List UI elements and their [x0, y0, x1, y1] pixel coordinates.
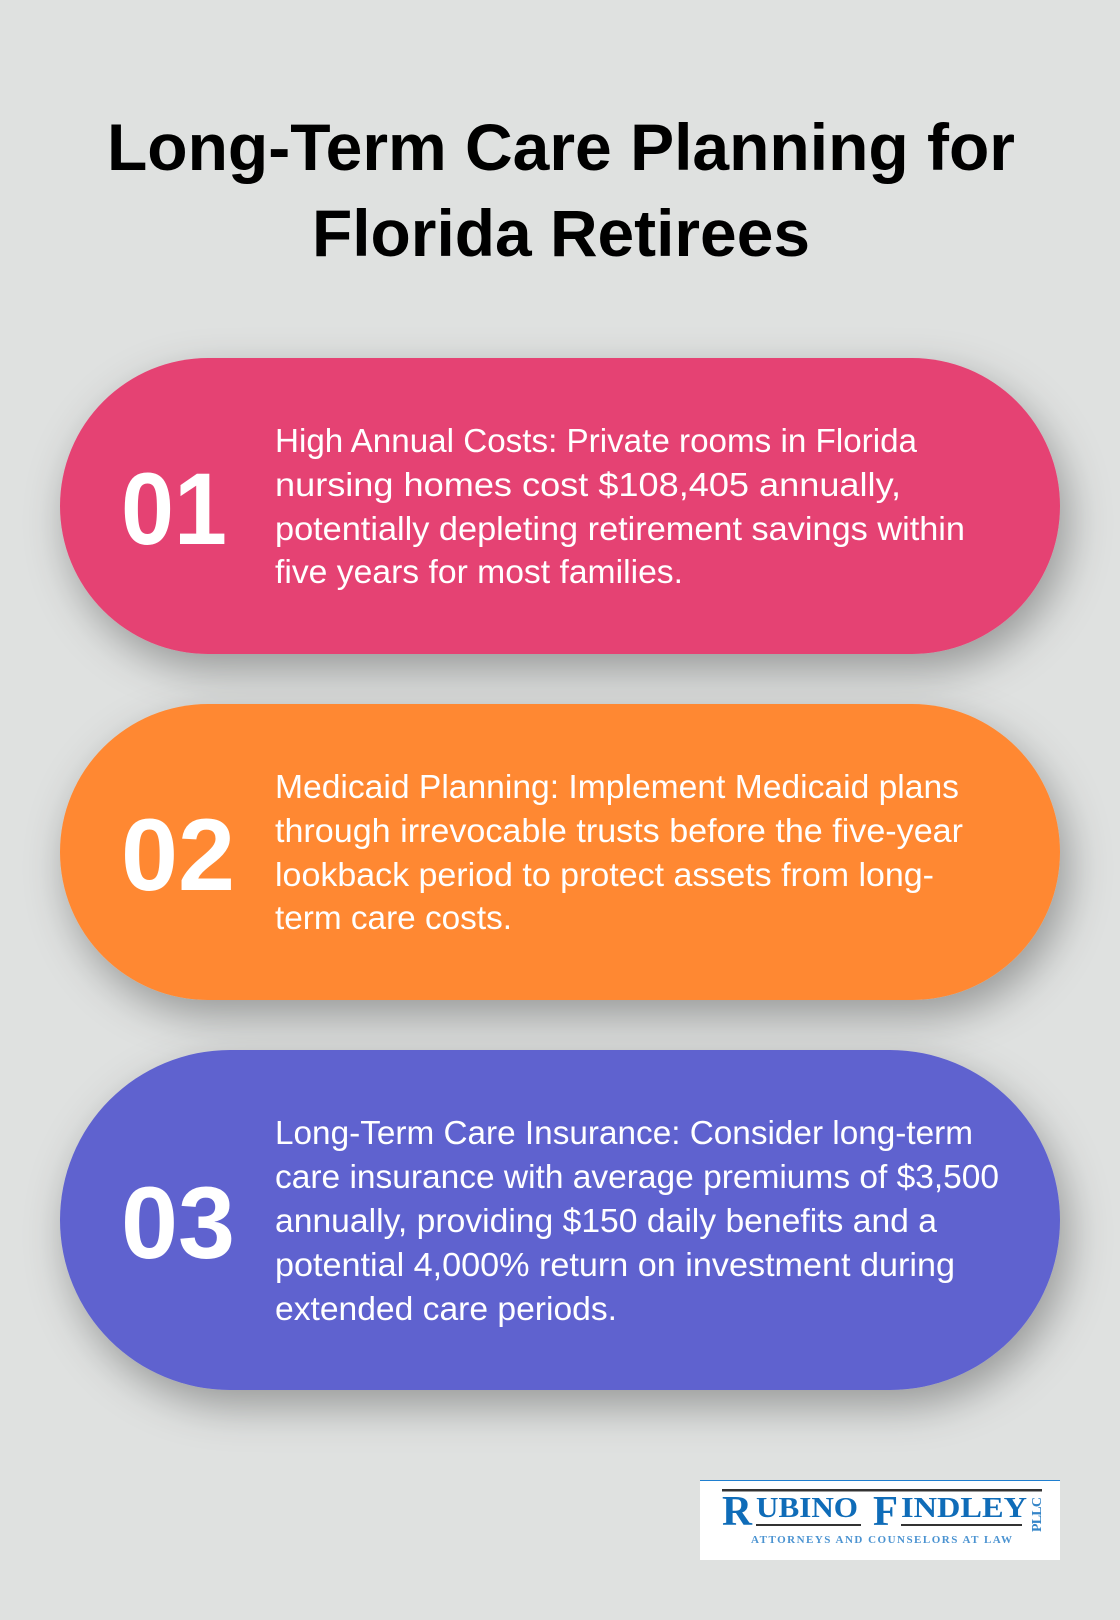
- text block: high annual costs: High Annual Costs: Private rooms in Florida: [275, 422, 918, 459]
- text block: medicaid planning: Medicaid Planning: Implement Medicaid plans: [275, 768, 959, 805]
- panel: medicaid planning: [60, 704, 1060, 1000]
- text block: long-term care insurance: annually, providing $150 daily benefits and a: [275, 1202, 938, 1239]
- pill background pink: [60, 358, 1060, 654]
- title: [107, 110, 1015, 270]
- title: Long-Term Care Planning for: [107, 110, 1015, 184]
- logo: Rubino Findley PLLC: UBINO: [756, 1492, 858, 1524]
- text block: medicaid planning: term care costs.: [275, 899, 512, 936]
- panel: high annual costs: [60, 358, 1060, 654]
- text block: long-term care insurance: extended care periods.: [275, 1290, 617, 1327]
- text block: high annual costs: five years for most families.: [275, 553, 683, 590]
- panel: long-term care insurance: [60, 1050, 1060, 1390]
- number 03: 03: [121, 1166, 235, 1280]
- logo: Rubino Findley PLLC: R: [722, 1489, 753, 1535]
- logo: Rubino Findley PLLC: PLLC: [1030, 1497, 1045, 1532]
- text block: medicaid planning: lookback period to protect assets from long-: [275, 856, 934, 893]
- text block: medicaid planning: [275, 768, 963, 936]
- number 02: 02: [121, 798, 235, 912]
- logo: Rubino Findley PLLC: [700, 1480, 1060, 1560]
- text block: medicaid planning: through irrevocable trusts before the five-year: [275, 812, 963, 849]
- pill background orange: [60, 704, 1060, 1000]
- number 01: 01: [121, 452, 227, 566]
- text block: long-term care insurance: [275, 1114, 999, 1327]
- text block: long-term care insurance: care insurance with average premiums of $3,500: [275, 1158, 999, 1195]
- text block: high annual costs: potentially depleting retirement savings within: [275, 510, 965, 547]
- text block: long-term care insurance: potential 4,000% return on investment during: [275, 1246, 955, 1283]
- text block: high annual costs: [275, 422, 965, 590]
- text block: long-term care insurance: Long-Term Care Insurance: Consider long-term: [275, 1114, 973, 1151]
- logo: Rubino Findley PLLC: ATTORNEYS AND COUNSELORS AT LAW: [751, 1534, 1012, 1546]
- title: Florida Retirees: [312, 196, 810, 270]
- logo: Rubino Findley PLLC: F: [873, 1489, 898, 1535]
- pill background purple: [60, 1050, 1060, 1390]
- logo: Rubino Findley PLLC: INDLEY: [901, 1492, 1027, 1524]
- text block: high annual costs: nursing homes cost $108,405 annually,: [275, 466, 901, 503]
